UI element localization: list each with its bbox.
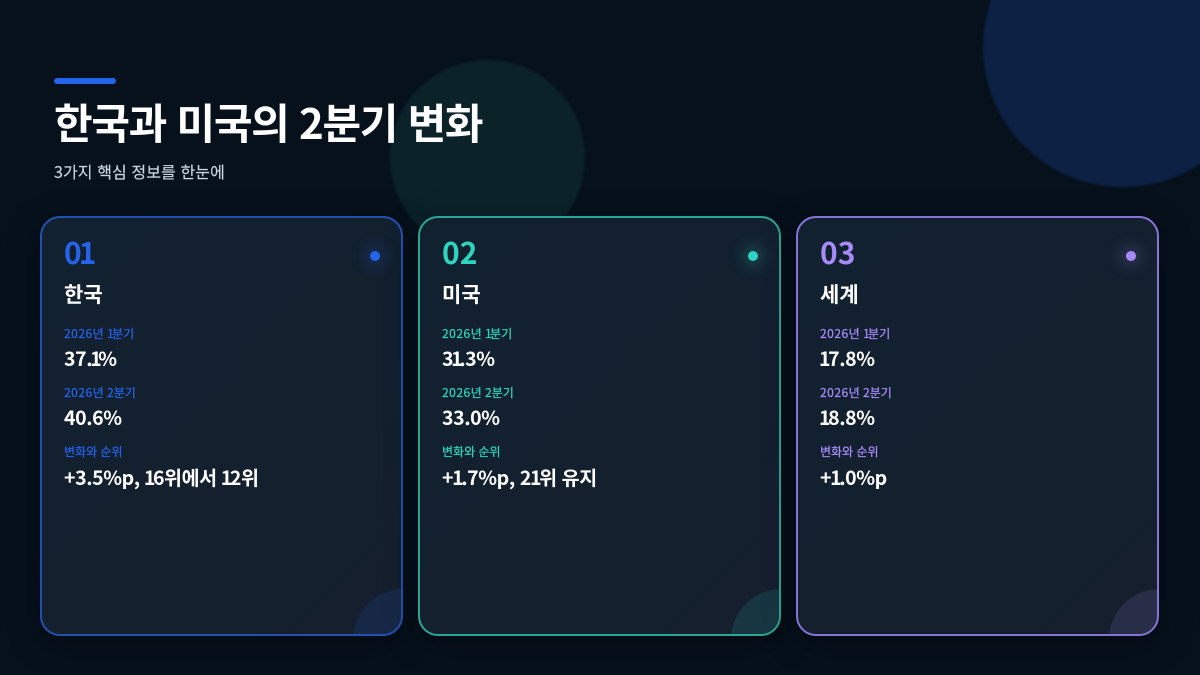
- value: change and rank: +3.5%p, 16위에서 12위: [64, 462, 258, 491]
- value: Q2: 40.6%: [64, 402, 122, 431]
- card heading: 세계: [820, 279, 859, 309]
- value: change and rank: +1.7%p, 21위 유지: [442, 462, 597, 491]
- panel: 미국: [418, 216, 781, 636]
- label: Q1: 2026년 1분기: [442, 325, 512, 342]
- card number: 02: [442, 229, 477, 273]
- corner accent: [353, 589, 454, 675]
- card heading: 한국: [64, 279, 103, 309]
- card number: 03: [820, 229, 855, 273]
- label: Q2: 2026년 2분기: [442, 384, 514, 401]
- label: Q2: 2026년 2분기: [820, 384, 892, 401]
- label: change and rank: 변화와 순위: [64, 443, 123, 460]
- value: Q1: 31.3%: [442, 343, 495, 372]
- status dot: [370, 250, 380, 260]
- value: Q2: 18.8%: [819, 402, 875, 431]
- status dot: [748, 250, 758, 260]
- card heading: 미국: [442, 279, 481, 309]
- label: Q1: 2026년 1분기: [64, 325, 134, 342]
- label: change and rank: 변화와 순위: [820, 443, 879, 460]
- accent bar: [54, 78, 116, 84]
- corner accent: [1109, 589, 1200, 675]
- title: 한국과 미국의 2분기 변화: [54, 91, 482, 152]
- label: Q2: 2026년 2분기: [64, 384, 136, 401]
- label: change and rank: 변화와 순위: [442, 443, 501, 460]
- panel: 한국: [40, 216, 403, 636]
- corner accent: [731, 589, 832, 675]
- subtitle: 3가지 핵심 정보를 한눈에: [54, 159, 225, 183]
- card number: 01: [64, 229, 96, 273]
- value: Q1: 37.1%: [64, 343, 117, 372]
- label: Q1: 2026년 1분기: [820, 325, 890, 342]
- decorative blue circle: [983, 0, 1200, 187]
- value: Q1: 17.8%: [819, 343, 875, 372]
- value: Q2: 33.0%: [442, 402, 500, 431]
- status dot: [1126, 250, 1136, 260]
- decorative green circle: [390, 60, 585, 255]
- value: change and rank: +1.0%p: [820, 462, 887, 491]
- panel: 세계: [796, 216, 1159, 636]
